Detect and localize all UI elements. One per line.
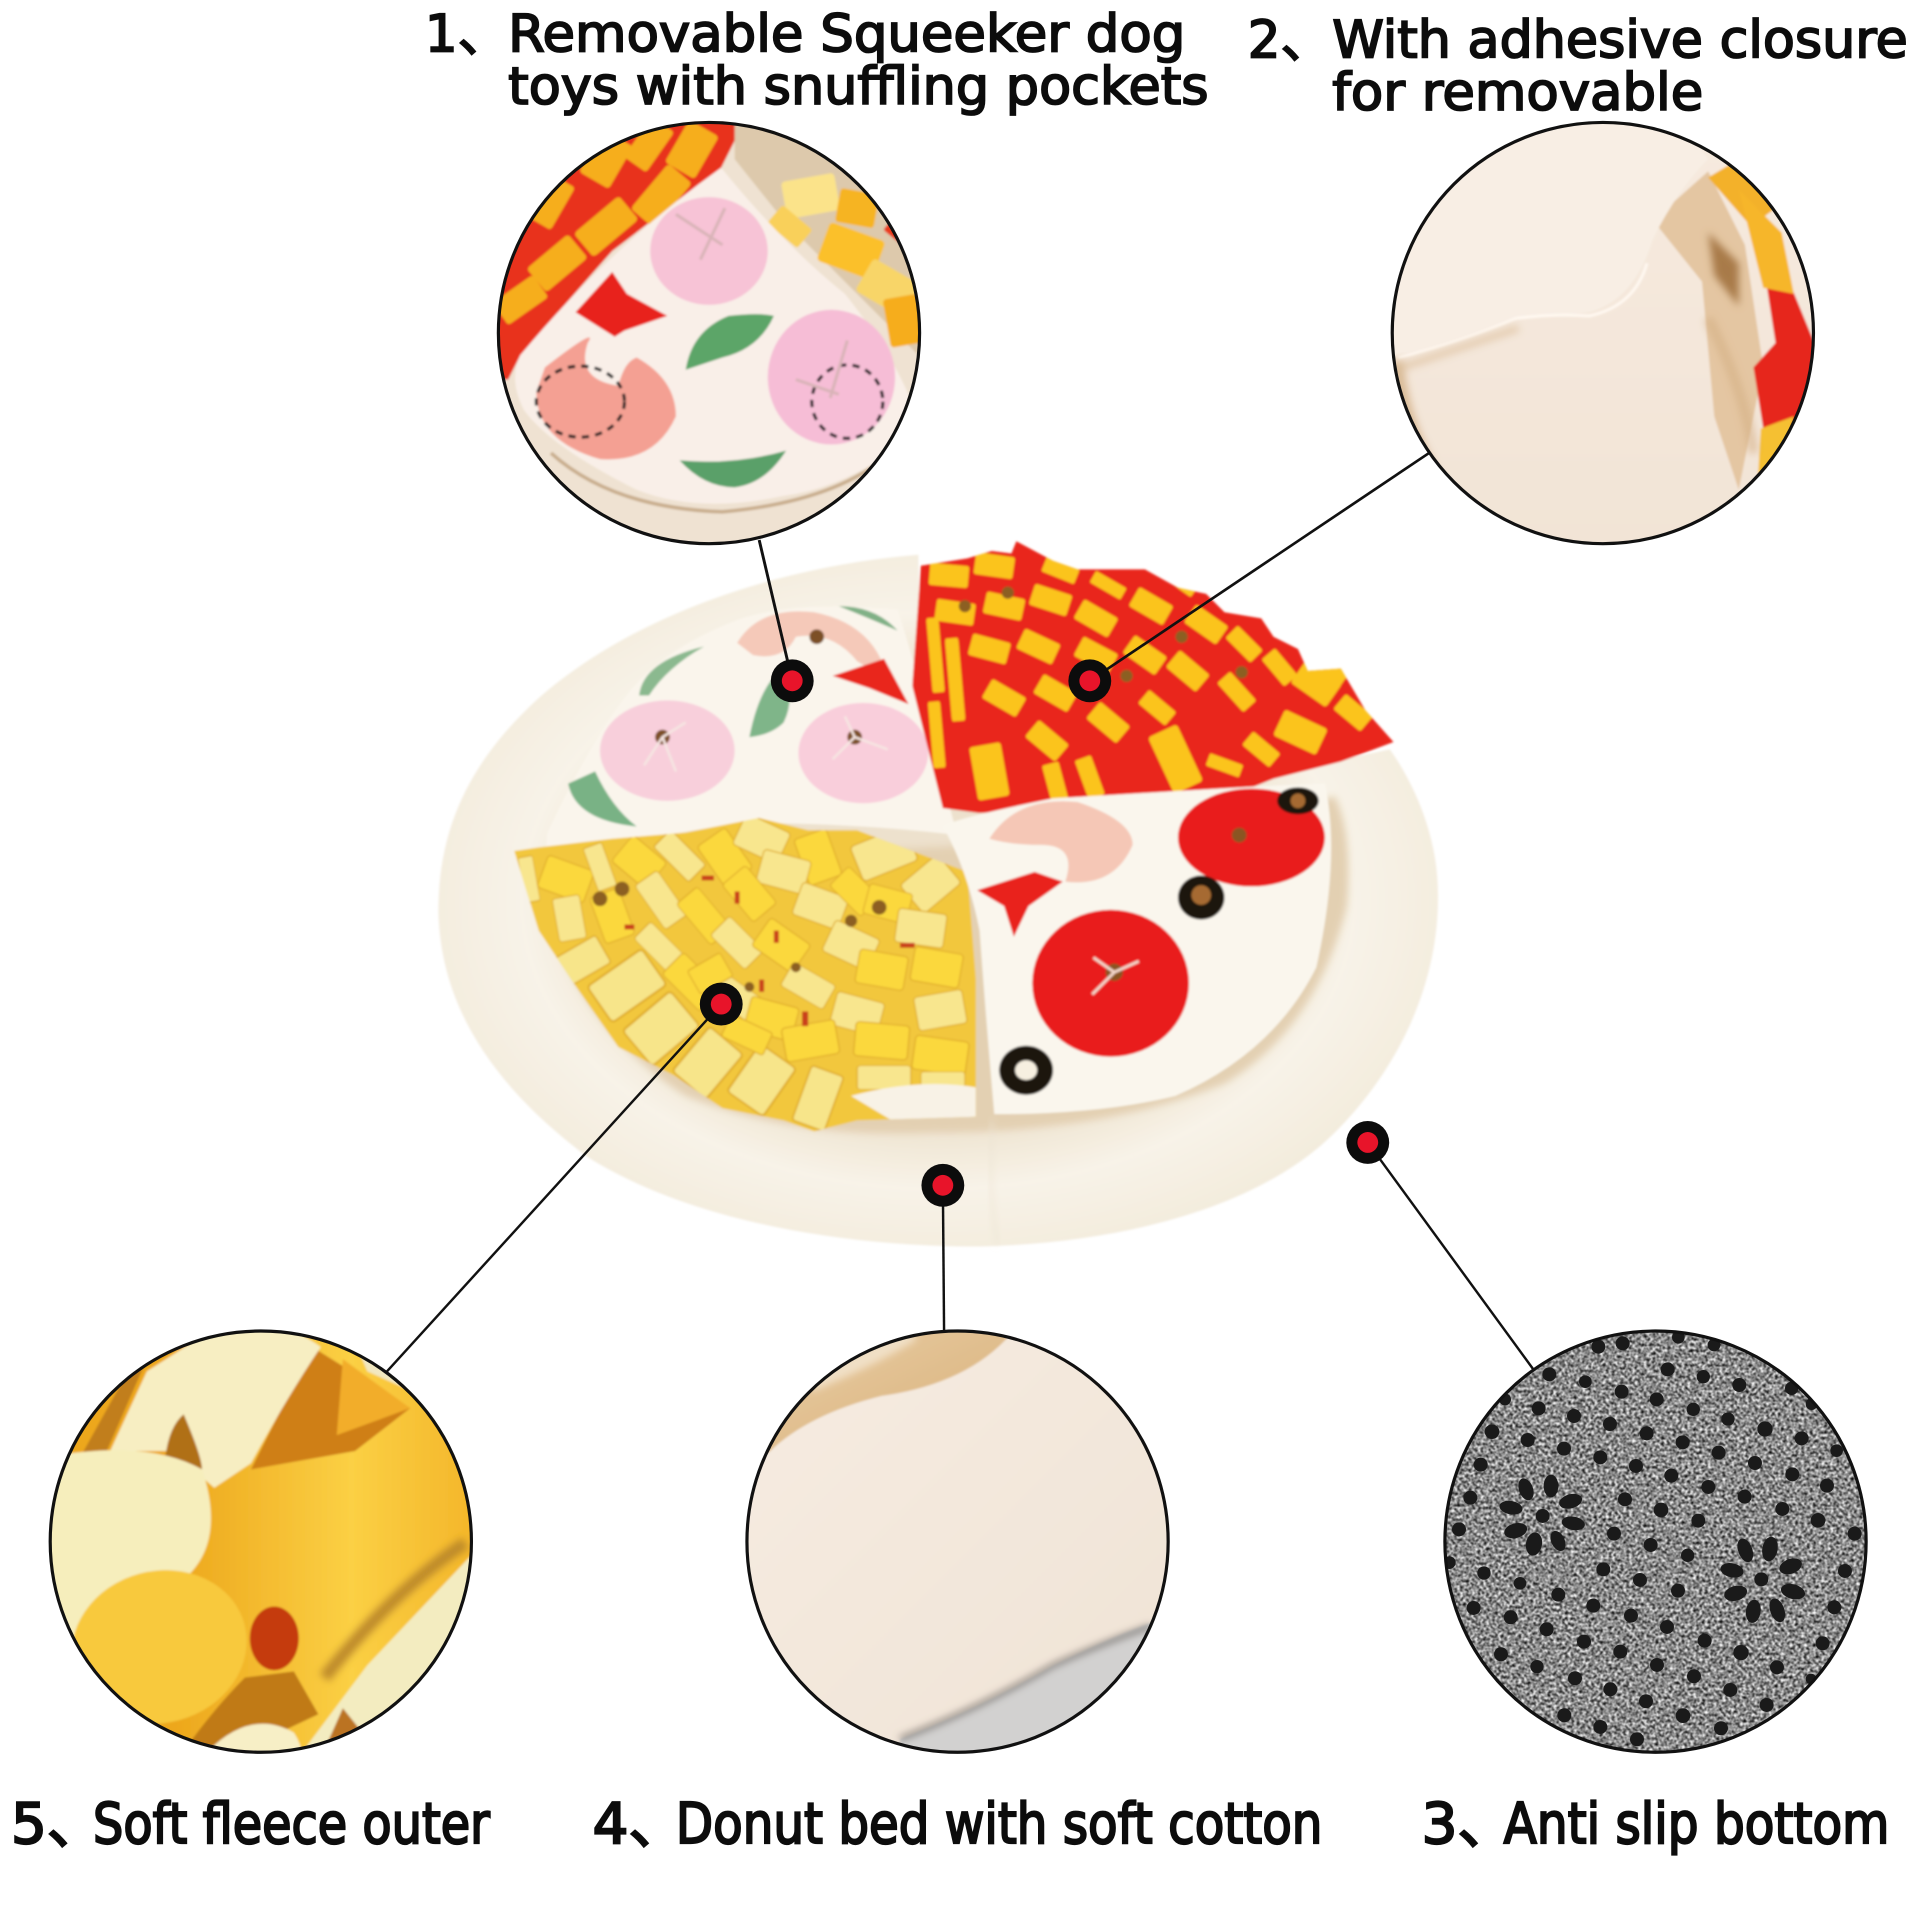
slice: yellow tufts bbox=[502, 808, 992, 1139]
detail circle 2: adhesive closure bbox=[1384, 116, 1824, 551]
slice: cream with red circles bbox=[947, 784, 1332, 1116]
heading: feature 1: Removable Squeeker dog bbox=[508, 4, 1185, 64]
connector line: feature 4 bbox=[943, 1185, 944, 1332]
connector line: feature 1 bbox=[759, 540, 792, 681]
label: feature 5: Soft fleece outer bbox=[93, 1792, 491, 1857]
slice tip bbox=[851, 1084, 976, 1122]
inner shadow of bed bbox=[563, 796, 1348, 1133]
squeeker slice body bbox=[515, 168, 912, 504]
detail circle 1: squeeker slice bbox=[490, 116, 931, 551]
bed seams bbox=[990, 1120, 998, 1244]
marker dot: feature 3 bbox=[1346, 1121, 1389, 1164]
connector line: feature 3 bbox=[1368, 1142, 1533, 1369]
detail circle 5: fleece tufts bbox=[43, 1322, 490, 1769]
label: feature 4: Donut bed with soft cotton bbox=[676, 1792, 1322, 1857]
label: feature 5: 5、 bbox=[11, 1792, 103, 1857]
heading: feature 2 bbox=[1248, 11, 1908, 123]
marker dot: feature 4 bbox=[921, 1164, 964, 1207]
slice: cream with pink circles bbox=[546, 606, 958, 847]
detail circle 4: donut bed bbox=[741, 1322, 1182, 1763]
heading: feature 1 bbox=[425, 4, 1209, 117]
label: feature 3: 3、 bbox=[1422, 1792, 1514, 1857]
label: feature 4: 4、 bbox=[593, 1792, 685, 1857]
marker dot: feature 1 bbox=[771, 659, 814, 702]
slice: red and yellow tufts bbox=[906, 539, 1396, 820]
heading: feature 2: for removable bbox=[1332, 63, 1703, 123]
heading: feature 1: toys with snuffling pockets bbox=[508, 57, 1209, 117]
detail circle 3: anti slip bottom bbox=[1439, 1325, 1873, 1760]
marker dot: feature 2 bbox=[1068, 659, 1111, 702]
donut bed bbox=[438, 555, 1438, 1247]
marker dot: feature 5 bbox=[700, 983, 743, 1026]
heading: feature 2: With adhesive closure bbox=[1332, 11, 1908, 71]
pizza snuffle mat photo bbox=[438, 539, 1438, 1247]
heading: feature 2: 2、 bbox=[1248, 11, 1332, 71]
heading: feature 1: 1、 bbox=[425, 4, 509, 64]
connector line: feature 2 bbox=[1090, 453, 1429, 681]
connector line: feature 5 bbox=[387, 1004, 721, 1371]
